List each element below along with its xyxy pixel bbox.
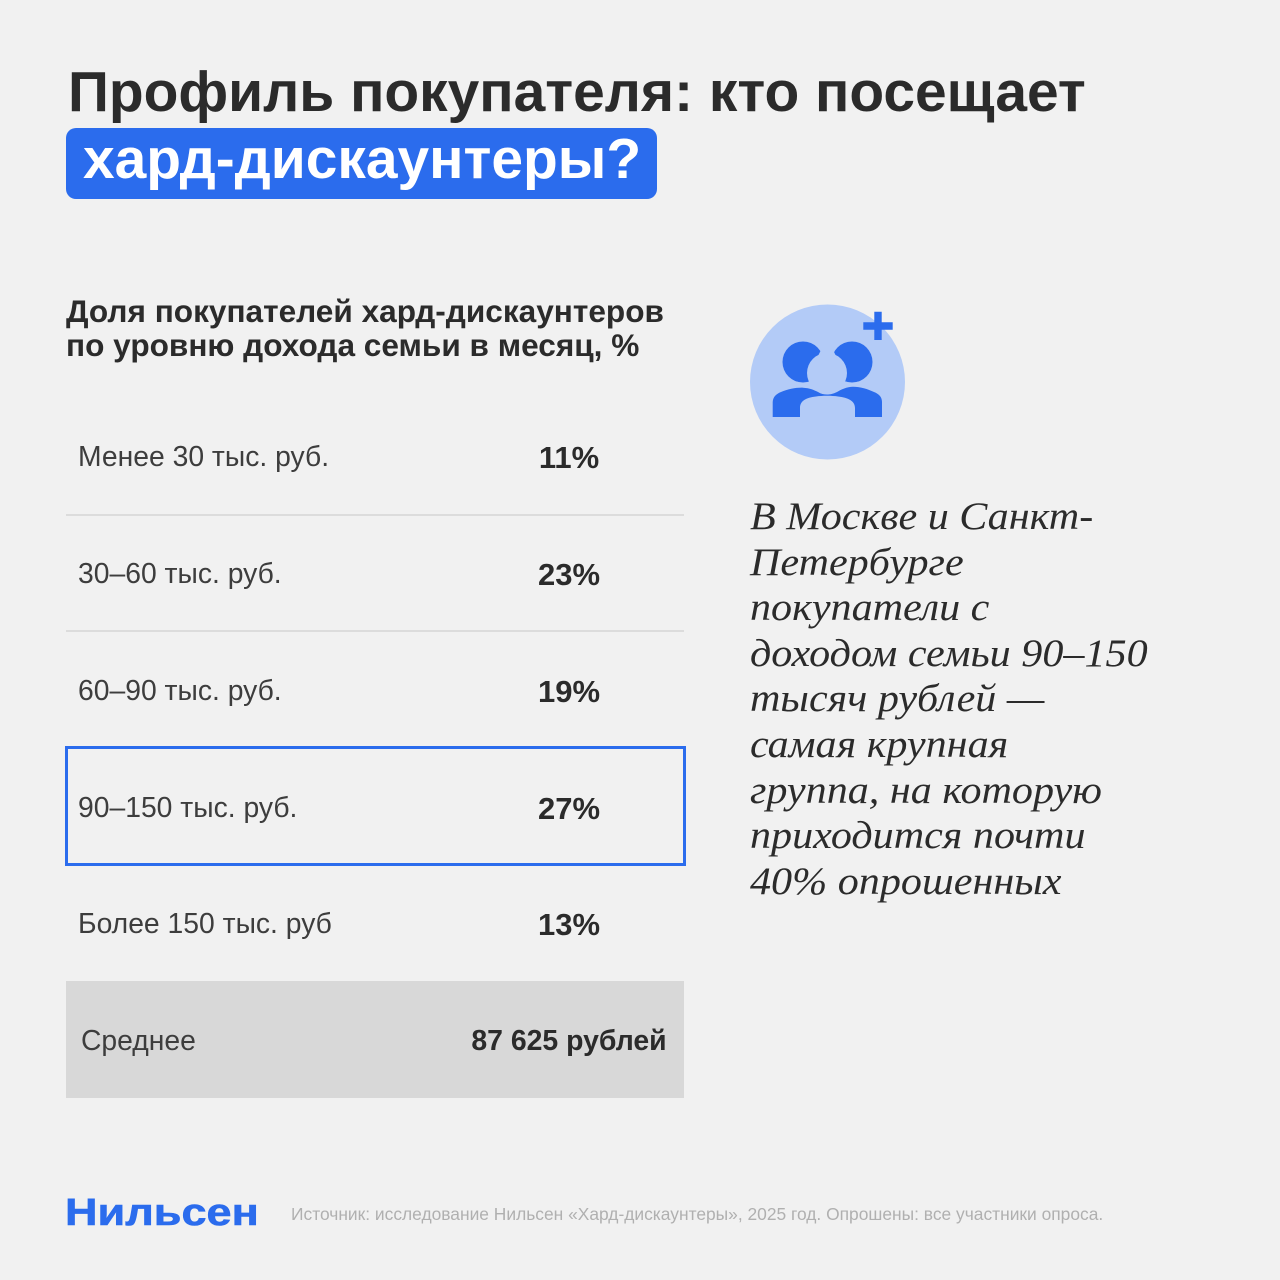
callout text: приходится почти [750, 814, 1086, 857]
source note: Источник: исследование Нильсен «Хард-дискаунтеры», 2025 год. Опрошены: все участники опроса. [291, 1204, 1103, 1224]
row: 90-150 highlighted: 90–150 тыс. руб. [78, 791, 297, 823]
row: over 150 [78, 907, 600, 942]
icon: people with plus [750, 304, 905, 460]
callout text: доходом семьи 90–150 [750, 632, 1148, 675]
title [66, 60, 1086, 199]
callout text: Петербурге [750, 541, 964, 584]
row: 30-60 [66, 516, 684, 632]
table heading: по уровню дохода семьи в месяц, % [66, 327, 639, 363]
callout text: самая крупная [750, 723, 1008, 766]
callout text: 40% опрошенных [750, 860, 1061, 903]
row: 60-90 [78, 674, 600, 709]
callout text: В Москве и Санкт- [750, 495, 1093, 538]
callout text: тысяч рублей — [750, 677, 1044, 720]
title highlight: хард-дискаунтеры? [83, 127, 641, 191]
row: under 30: Менее 30 тыс. руб. [78, 440, 329, 472]
income table [65, 440, 686, 1098]
table heading [66, 293, 664, 363]
row: 60-90: 60–90 тыс. руб. [78, 674, 282, 706]
row: average [66, 981, 684, 1098]
callout text: группа, на которую [750, 769, 1102, 812]
row: under 30 [66, 400, 684, 516]
row: 90-150 highlighted [65, 746, 686, 866]
row: over 150: 13% [538, 907, 600, 942]
row: over 150: Более 150 тыс. руб [78, 907, 332, 939]
callout text [750, 495, 1148, 903]
row: under 30: 11% [539, 440, 599, 475]
row: 60-90: 19% [538, 674, 600, 709]
logo: Nielsen: Нильсен [65, 1192, 259, 1234]
row: 30-60: 23% [538, 557, 600, 592]
callout text: покупатели с [750, 586, 989, 629]
row: average: Среднее [81, 1024, 196, 1056]
title line 1: Профиль покупателя: кто посещает [68, 60, 1086, 124]
row: average: 87 625 рублей [471, 1025, 667, 1057]
row: 30-60: 30–60 тыс. руб. [78, 557, 282, 589]
table heading: Доля покупателей хард-дискаунтеров [66, 293, 664, 329]
row: 90-150 highlighted: 27% [538, 791, 600, 826]
